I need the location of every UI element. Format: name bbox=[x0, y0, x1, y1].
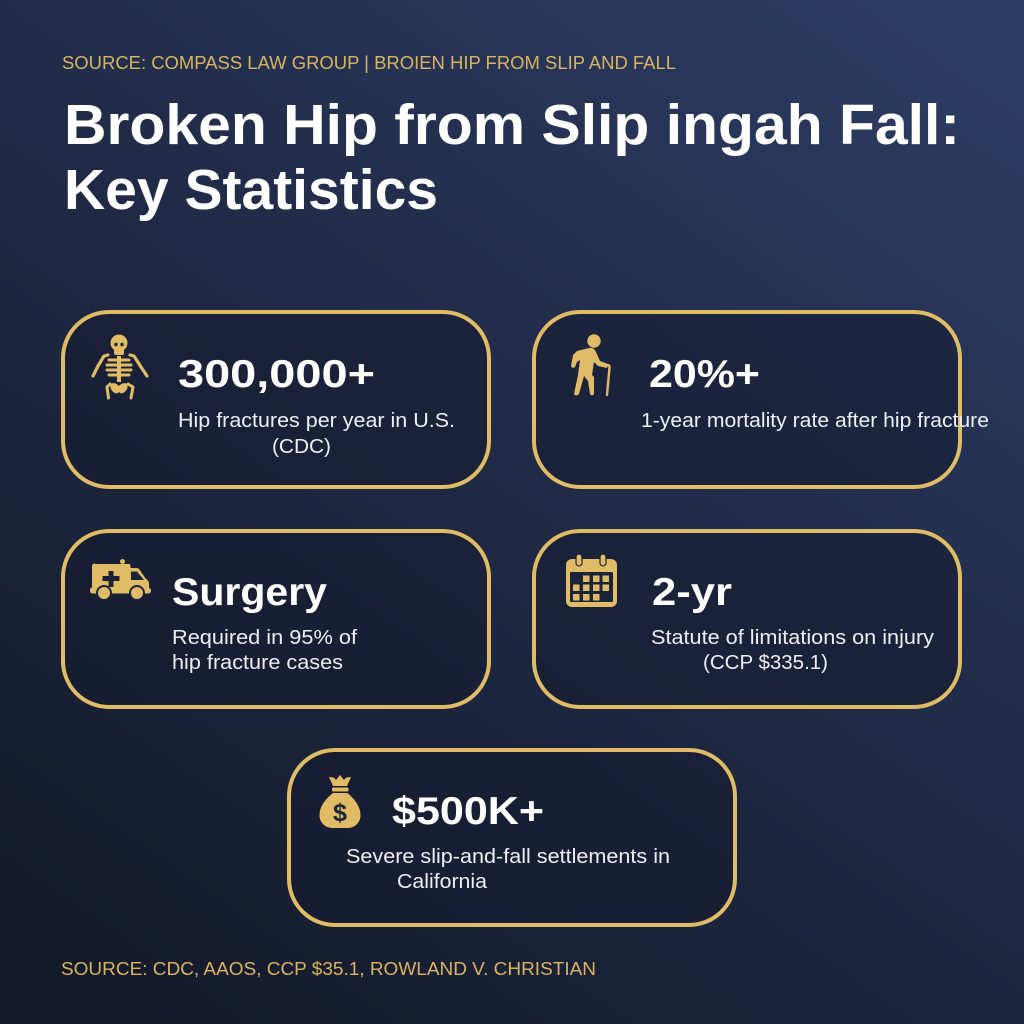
title: Broken Hip from Slip ingah Fall: bbox=[64, 93, 960, 157]
icon: person with cane bbox=[571, 334, 610, 396]
statistic: Surgery bbox=[172, 571, 327, 614]
description: Hip fractures per year in U.S. bbox=[178, 409, 455, 432]
description: hip fracture cases bbox=[172, 651, 343, 674]
statistic: 2-yr bbox=[652, 571, 732, 614]
description: 1-year mortality rate after hip fracture bbox=[641, 409, 989, 432]
icon: money bag bbox=[320, 775, 360, 828]
source line top: SOURCE: COMPASS LAW GROUP | BROIEN HIP FROM SLIP AND FALL bbox=[62, 53, 676, 73]
description bbox=[178, 409, 455, 458]
panel: settlements bbox=[289, 750, 735, 925]
description: California bbox=[397, 870, 488, 893]
description: Statute of limitations on injury bbox=[651, 626, 935, 649]
icon: ambulance bbox=[90, 559, 151, 600]
panel: mortality bbox=[534, 312, 989, 487]
description: Severe slip-and-fall settlements in bbox=[346, 845, 670, 868]
description bbox=[346, 845, 670, 893]
panel: hip fractures bbox=[63, 312, 489, 487]
panel: statute of limitations bbox=[534, 531, 960, 707]
description: Required in 95% of bbox=[172, 626, 357, 649]
description: (CDC) bbox=[272, 435, 331, 458]
description bbox=[651, 626, 935, 674]
title bbox=[64, 93, 960, 222]
icon: calendar bbox=[566, 554, 617, 607]
panel: surgery bbox=[63, 531, 489, 707]
source line bottom: SOURCE: CDC, AAOS, CCP $35.1, ROWLAND V. CHRISTIAN bbox=[61, 959, 596, 979]
icon: money bag: $ bbox=[333, 799, 347, 827]
statistic: 300,000+ bbox=[178, 353, 375, 396]
statistic: 20%+ bbox=[649, 353, 760, 396]
description: (CCP $335.1) bbox=[703, 651, 828, 674]
title: Key Statistics bbox=[64, 158, 438, 222]
icon: skeleton bbox=[93, 334, 147, 398]
description bbox=[172, 626, 357, 674]
statistic: $500K+ bbox=[392, 790, 544, 833]
